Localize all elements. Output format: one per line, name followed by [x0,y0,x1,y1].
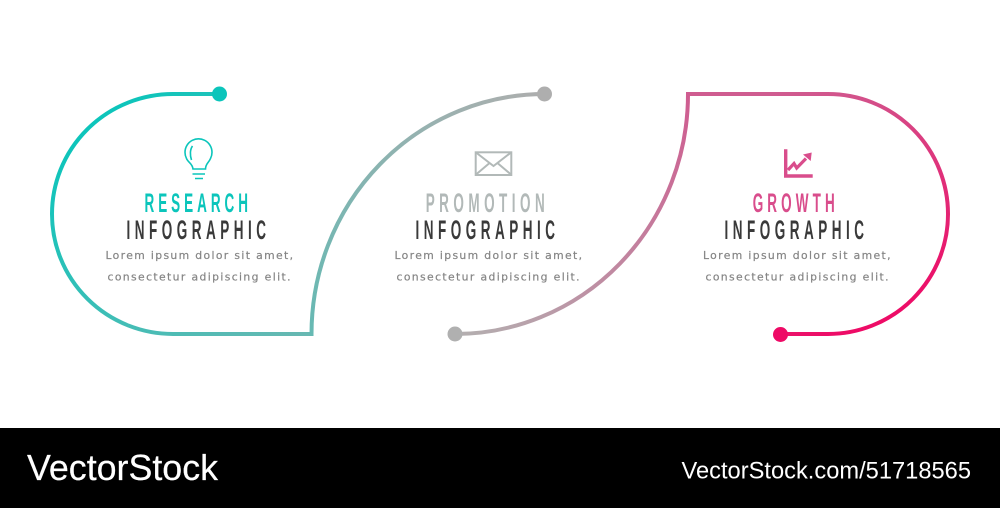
body text [394,249,582,284]
research outline curve [52,94,312,334]
growth end dot [773,327,788,342]
panel: research [52,86,312,334]
start dot [448,326,462,342]
panel: promotion [312,86,582,336]
icon: light bulb [185,139,212,178]
body text: Lorem ipsum dolor sit amet, [394,249,582,262]
subheading: infographic: INFOGRAPHIC [724,215,864,245]
icon: chart [784,149,813,178]
body text: consectetur adipiscing elit. [706,270,888,284]
body text [703,249,890,284]
body text: consectetur adipiscing elit. [396,270,580,284]
subheading: infographic: INFOGRAPHIC [126,215,266,245]
icon: envelope [476,152,511,175]
footer url text: VectorStock.com/51718565 [682,458,971,484]
growth outline curve [686,94,948,334]
promotion end dot [537,86,552,102]
heading: research: RESEARCH [144,188,248,218]
promotion outline curve [312,94,545,336]
body text: consectetur adipiscing elit. [108,270,290,284]
body text: Lorem ipsum dolor sit amet, [106,249,293,262]
connecting curve [455,94,688,334]
heading: growth: GROWTH [753,188,835,218]
panel: growth [448,94,948,342]
body text [106,249,293,284]
footer logo text: VectorStock [27,447,219,488]
subheading: infographic: INFOGRAPHIC [416,215,555,245]
body text: Lorem ipsum dolor sit amet, [703,249,890,262]
footer band [0,428,1000,508]
research end dot [212,86,227,102]
heading: promotion: PROMOTION [426,188,545,218]
